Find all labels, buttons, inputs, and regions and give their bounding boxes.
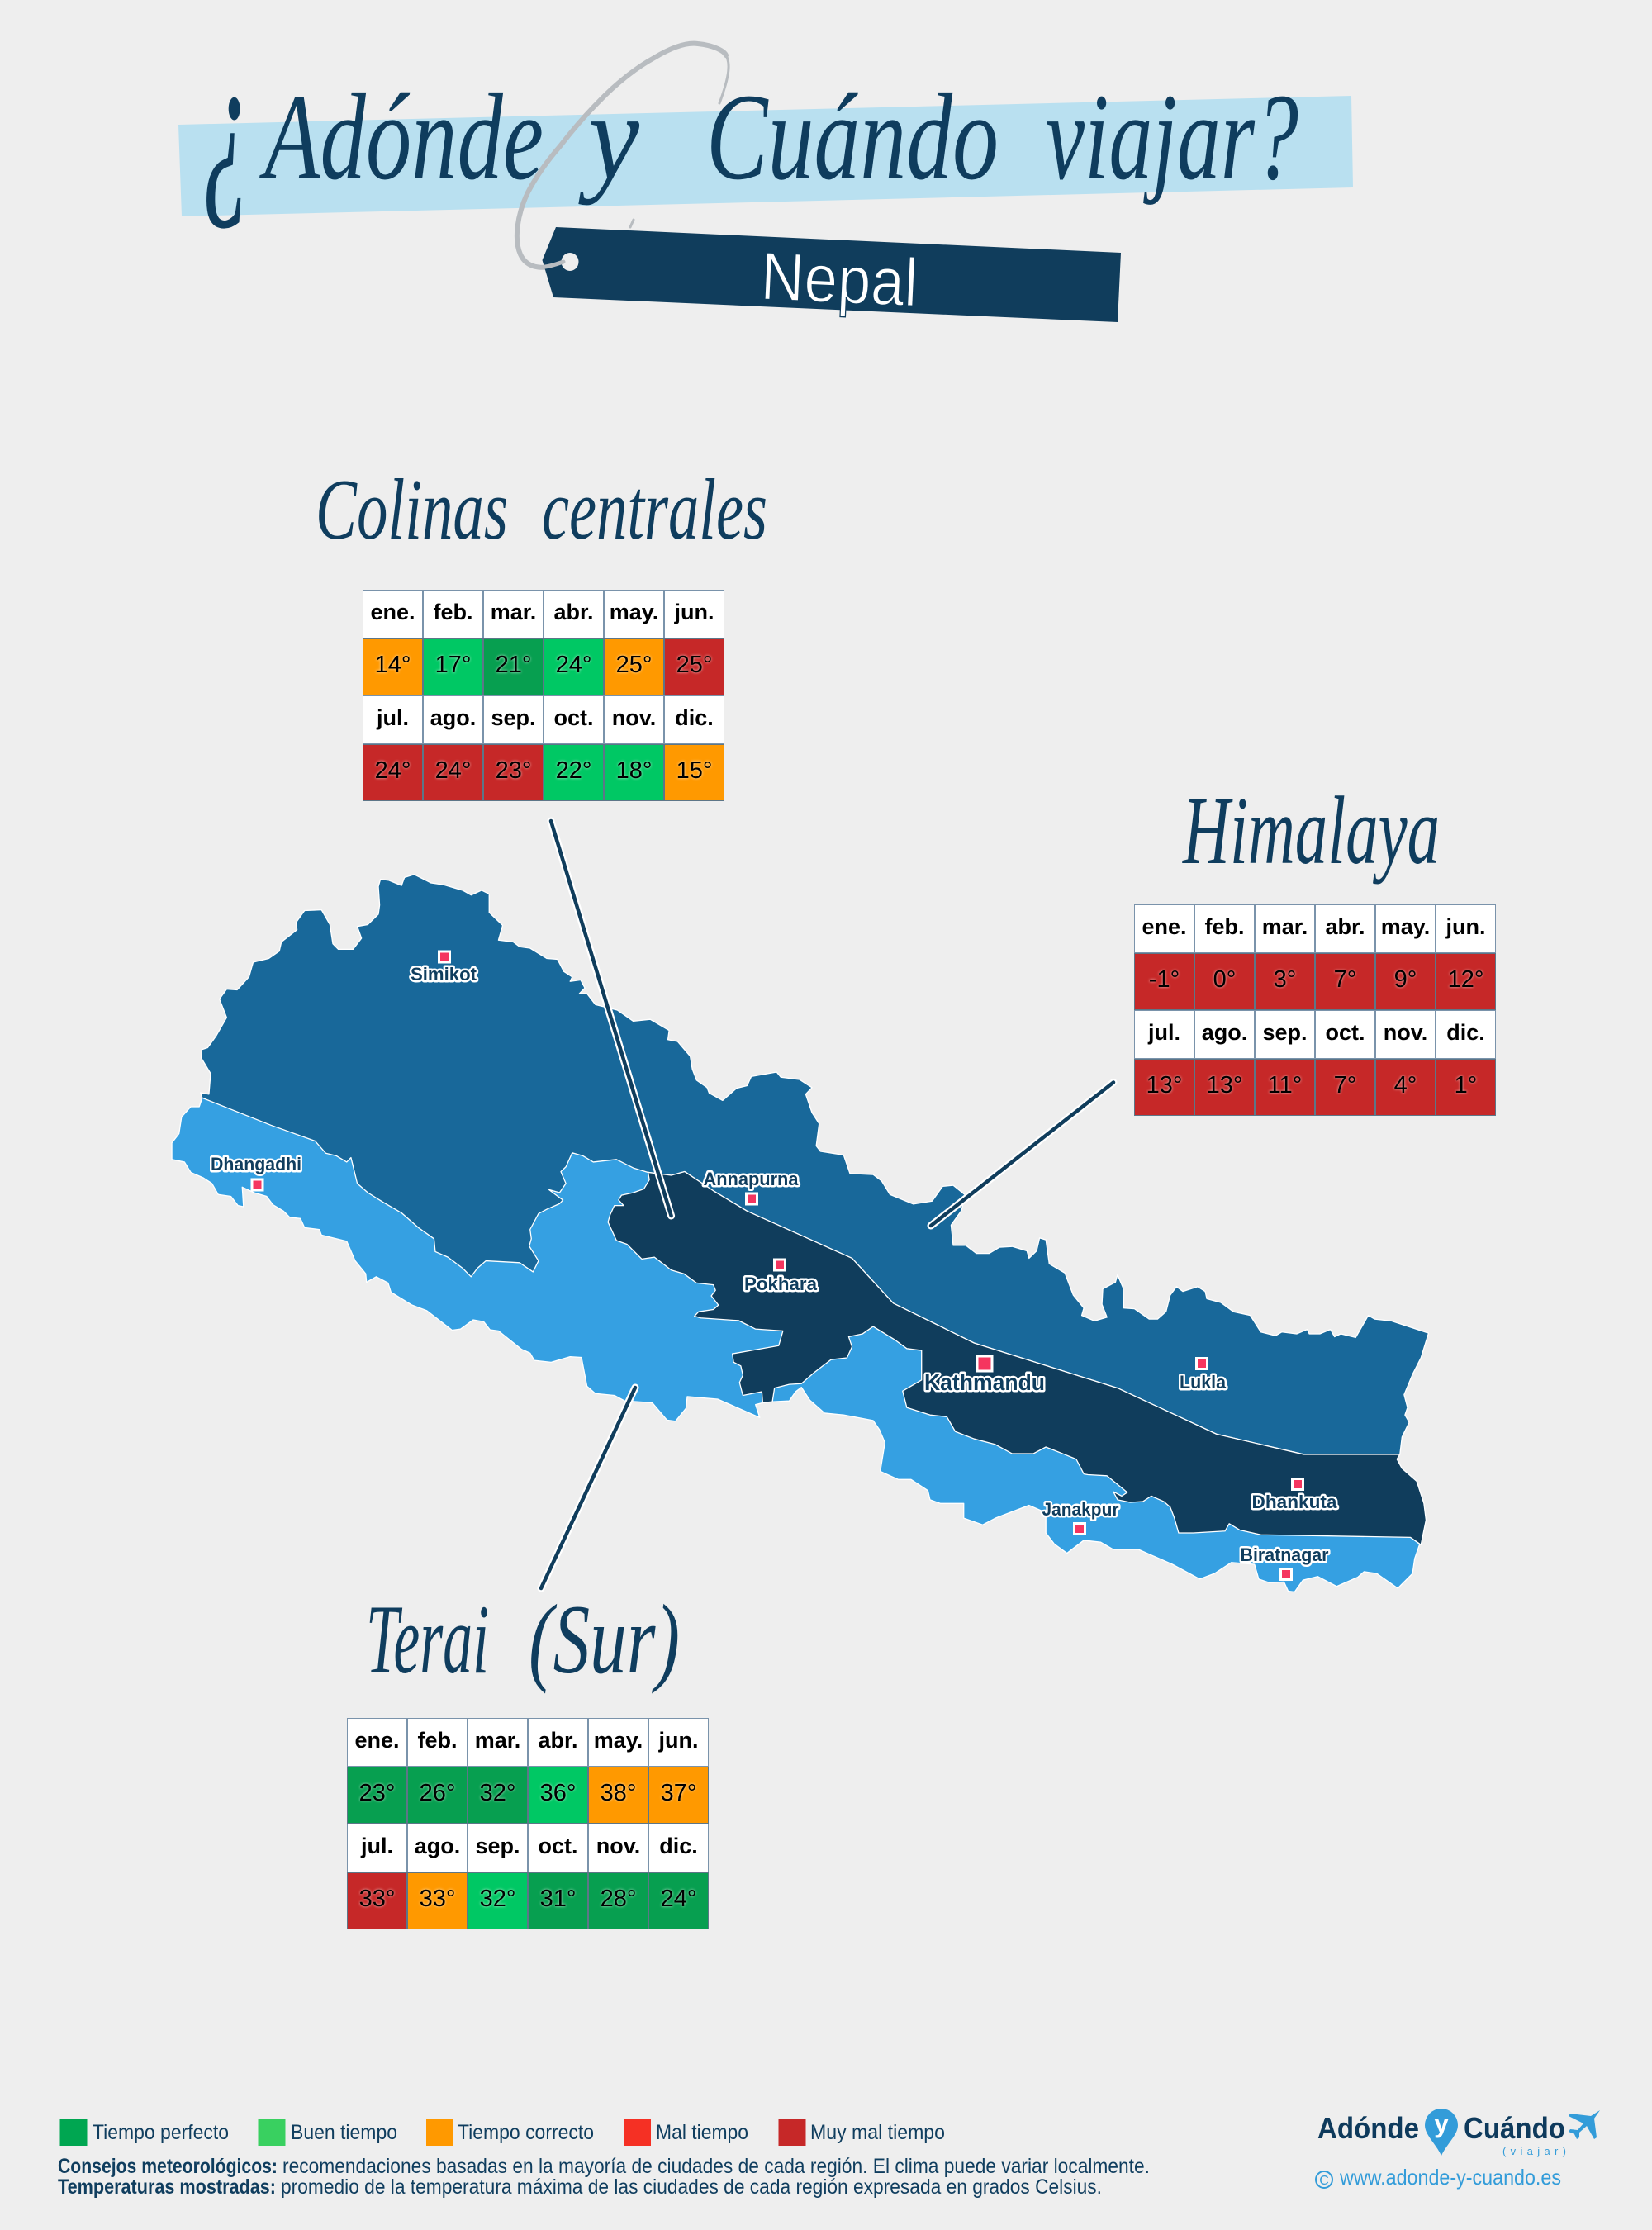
- heading: Colinas centrales: Colinas: [316, 461, 508, 558]
- months row 2: nov.: [612, 705, 656, 730]
- temperatures row 1: [347, 1767, 709, 1824]
- months row 1: jun.: [674, 600, 714, 624]
- temperatures row 2: [363, 744, 724, 801]
- tag string: [517, 44, 729, 268]
- city: Pokhara: Pokhara: [744, 1274, 818, 1294]
- city: Kathmandu: [924, 1356, 1045, 1395]
- legend: Tiempo correcto: [426, 2118, 594, 2146]
- months row 1: ene.: [1142, 914, 1187, 939]
- temperatures row 1: 12°: [1448, 966, 1483, 993]
- temperatures row 2: 4°: [1394, 1072, 1417, 1098]
- temperatures row 2: 18°: [616, 757, 652, 784]
- city: Dhangadhi: [211, 1154, 301, 1190]
- months row 2: nov.: [1384, 1020, 1427, 1045]
- temperatures row 1: 3°: [1274, 966, 1296, 993]
- months row 1: mar.: [1262, 914, 1308, 939]
- months row 1: abr.: [553, 600, 594, 624]
- months row 2: [363, 695, 724, 744]
- temperatures row 2: 31°: [540, 1886, 576, 1912]
- note: temperaturas mostradas: promedio de la temperatura máxima de las ciudades de cada región expresada en grados Celsius.: [281, 2175, 1102, 2199]
- temperatures row 2: 13°: [1146, 1072, 1182, 1098]
- legend: Tiempo perfecto: Tiempo perfecto: [93, 2121, 229, 2144]
- months row 2: sep.: [1262, 1020, 1308, 1045]
- legend: Mal tiempo: Mal tiempo: [656, 2121, 748, 2144]
- country name: Nepal: [759, 239, 919, 321]
- heading: Terai (Sur): Terai: [366, 1584, 489, 1694]
- table: Colinas centrales: [363, 590, 724, 801]
- region: Terai: [172, 1095, 1420, 1592]
- legend: Buen tiempo: Buen tiempo: [291, 2121, 397, 2144]
- note: consejos meteorológicos: Consejos meteorológicos:: [58, 2155, 278, 2178]
- months row 2: dic.: [675, 705, 714, 730]
- months row 2: oct.: [553, 705, 593, 730]
- months row 1: mar.: [475, 1728, 520, 1753]
- months row 2: jul.: [361, 1834, 393, 1858]
- temperatures row 2: [1134, 1059, 1496, 1116]
- months row 2: ago.: [430, 705, 476, 730]
- heading: Terai (Sur): (Sur): [529, 1584, 680, 1694]
- temperatures row 2: 32°: [480, 1886, 515, 1912]
- title band: [178, 96, 1353, 216]
- temperatures row 1: 24°: [556, 652, 591, 678]
- city: Simikot: [411, 951, 477, 985]
- temperatures row 1: 38°: [601, 1780, 636, 1806]
- legend: Mal tiempo: [624, 2118, 748, 2146]
- months row 1: jun.: [1446, 914, 1485, 939]
- temperatures row 1: 7°: [1334, 966, 1356, 993]
- months row 1: may.: [1381, 914, 1430, 939]
- temperatures row 1: 21°: [496, 652, 531, 678]
- temperatures row 1: -1°: [1149, 966, 1180, 993]
- logo: y: [1434, 2109, 1449, 2138]
- months row 1: may.: [610, 600, 658, 624]
- temperatures row 2: 33°: [359, 1886, 395, 1912]
- main title: Adónde: [259, 69, 544, 206]
- heading: Himalaya: Himalaya: [1182, 776, 1440, 885]
- city: Lukla: Lukla: [1180, 1372, 1227, 1393]
- months row 2: oct.: [538, 1834, 578, 1858]
- heading: Terai (Sur): [366, 1584, 680, 1694]
- region: Colinas centrales: [608, 1172, 1426, 1544]
- logo: (viajar): [1502, 2145, 1566, 2157]
- temperatures row 2: 1°: [1455, 1072, 1477, 1098]
- city: Pokhara: [744, 1260, 818, 1294]
- months row 2: ago.: [1202, 1020, 1247, 1045]
- city: Janakpur: Janakpur: [1042, 1499, 1119, 1520]
- months row 2: jul.: [377, 705, 409, 730]
- main title: ¿: [202, 16, 251, 230]
- temperatures row 1: 0°: [1213, 966, 1236, 993]
- temperatures row 1: 9°: [1394, 966, 1417, 993]
- city: Dhankuta: Dhankuta: [1252, 1492, 1337, 1512]
- city: Lukla: [1180, 1358, 1227, 1393]
- months row 1: [363, 590, 724, 638]
- logo: [1317, 2109, 1600, 2157]
- months row 1: jun.: [659, 1728, 699, 1753]
- city: Annapurna: [704, 1169, 799, 1204]
- tag hole: [562, 253, 578, 271]
- months row 1: feb.: [433, 600, 472, 624]
- temperatures row 1: 23°: [359, 1780, 395, 1806]
- note: consejos meteorológicos: recomendaciones basadas en la mayoría de ciudades de cada región. El clima puede variar localmente.: [282, 2155, 1150, 2178]
- website: www.adonde-y-cuando.es: [1339, 2165, 1561, 2190]
- temperatures row 1: [1134, 953, 1496, 1010]
- months row 2: oct.: [1325, 1020, 1365, 1045]
- table: Terai: [347, 1718, 709, 1929]
- months row 1: [1134, 904, 1496, 953]
- leader: Terai: [541, 1388, 635, 1588]
- temperatures row 2: 24°: [375, 757, 411, 784]
- temperatures row 2: 15°: [676, 757, 712, 784]
- months row 2: nov.: [596, 1834, 640, 1858]
- months row 2: dic.: [1446, 1020, 1485, 1045]
- months row 1: may.: [594, 1728, 643, 1753]
- icon: map pin: [1425, 2109, 1458, 2156]
- temperatures row 1: 37°: [661, 1780, 696, 1806]
- months row 1: [347, 1718, 709, 1767]
- months row 1: feb.: [1204, 914, 1244, 939]
- legend: Buen tiempo: [258, 2118, 397, 2146]
- months row 2: ago.: [415, 1834, 460, 1858]
- main title: [202, 16, 1298, 230]
- temperatures row 2: [347, 1872, 709, 1929]
- note: temperaturas mostradas: Temperaturas mostradas:: [58, 2175, 276, 2199]
- temperatures row 2: 13°: [1207, 1072, 1242, 1098]
- temperatures row 2: 22°: [556, 757, 591, 784]
- temperatures row 2: 28°: [601, 1886, 636, 1912]
- legend: Muy mal tiempo: Muy mal tiempo: [810, 2121, 945, 2144]
- city: Biratnagar: Biratnagar: [1241, 1544, 1329, 1565]
- months row 2: sep.: [475, 1834, 520, 1858]
- leader: Himalaya: [931, 1082, 1113, 1226]
- temperatures row 1: 14°: [375, 652, 411, 678]
- temperatures row 2: 23°: [496, 757, 531, 784]
- logo: Cuándo: [1464, 2111, 1565, 2145]
- months row 1: feb.: [417, 1728, 458, 1753]
- icon: plane: [1569, 2110, 1600, 2139]
- legend: [59, 2118, 945, 2146]
- country tag: [542, 227, 1121, 322]
- city: Simikot: Simikot: [411, 964, 477, 985]
- map of Nepal: [172, 875, 1428, 1592]
- months row 2: sep.: [491, 705, 536, 730]
- city: Dhankuta: [1252, 1478, 1337, 1512]
- months row 1: abr.: [538, 1728, 578, 1753]
- temperatures row 1: 36°: [540, 1780, 576, 1806]
- heading: Colinas centrales: centrales: [542, 461, 767, 558]
- string over tag: [545, 262, 563, 267]
- main title: y: [578, 69, 639, 206]
- temperatures row 1: 26°: [420, 1780, 455, 1806]
- months row 2: [347, 1824, 709, 1872]
- heading: Colinas centrales: [316, 461, 767, 558]
- months row 1: ene.: [354, 1728, 400, 1753]
- temperatures row 1: 17°: [435, 652, 471, 678]
- months row 2: [1134, 1010, 1496, 1059]
- legend: Muy mal tiempo: [778, 2118, 945, 2146]
- legend: Tiempo correcto: Tiempo correcto: [458, 2121, 594, 2144]
- temperatures row 1: [363, 638, 724, 695]
- months row 1: mar.: [491, 600, 536, 624]
- months row 1: abr.: [1325, 914, 1365, 939]
- table: Himalaya: [1134, 904, 1496, 1116]
- logo: Adónde: [1317, 2111, 1419, 2145]
- temperatures row 2: 7°: [1334, 1072, 1356, 1098]
- city: Biratnagar: [1241, 1544, 1329, 1579]
- city: Dhangadhi: Dhangadhi: [211, 1154, 301, 1174]
- months row 1: ene.: [370, 600, 415, 624]
- region: Himalaya: [201, 875, 1428, 1454]
- months row 2: dic.: [659, 1834, 698, 1858]
- months row 2: jul.: [1148, 1020, 1180, 1045]
- legend: Tiempo perfecto: [59, 2118, 229, 2146]
- leader: Colinas centrales: [551, 821, 672, 1216]
- temperatures row 2: 24°: [435, 757, 471, 784]
- temperatures row 1: 32°: [480, 1780, 515, 1806]
- website: C: [1319, 2174, 1329, 2188]
- temperatures row 2: 11°: [1268, 1072, 1302, 1098]
- temperatures row 1: 25°: [616, 652, 652, 678]
- temperatures row 2: 33°: [420, 1886, 455, 1912]
- city: Kathmandu: Kathmandu: [924, 1369, 1045, 1395]
- main title: Cuándo: [706, 69, 999, 206]
- temperatures row 2: 24°: [661, 1886, 696, 1912]
- city: Janakpur: [1042, 1499, 1119, 1535]
- city: Annapurna: Annapurna: [704, 1169, 799, 1189]
- temperatures row 1: 25°: [676, 652, 712, 678]
- main title: viajar?: [1046, 69, 1298, 206]
